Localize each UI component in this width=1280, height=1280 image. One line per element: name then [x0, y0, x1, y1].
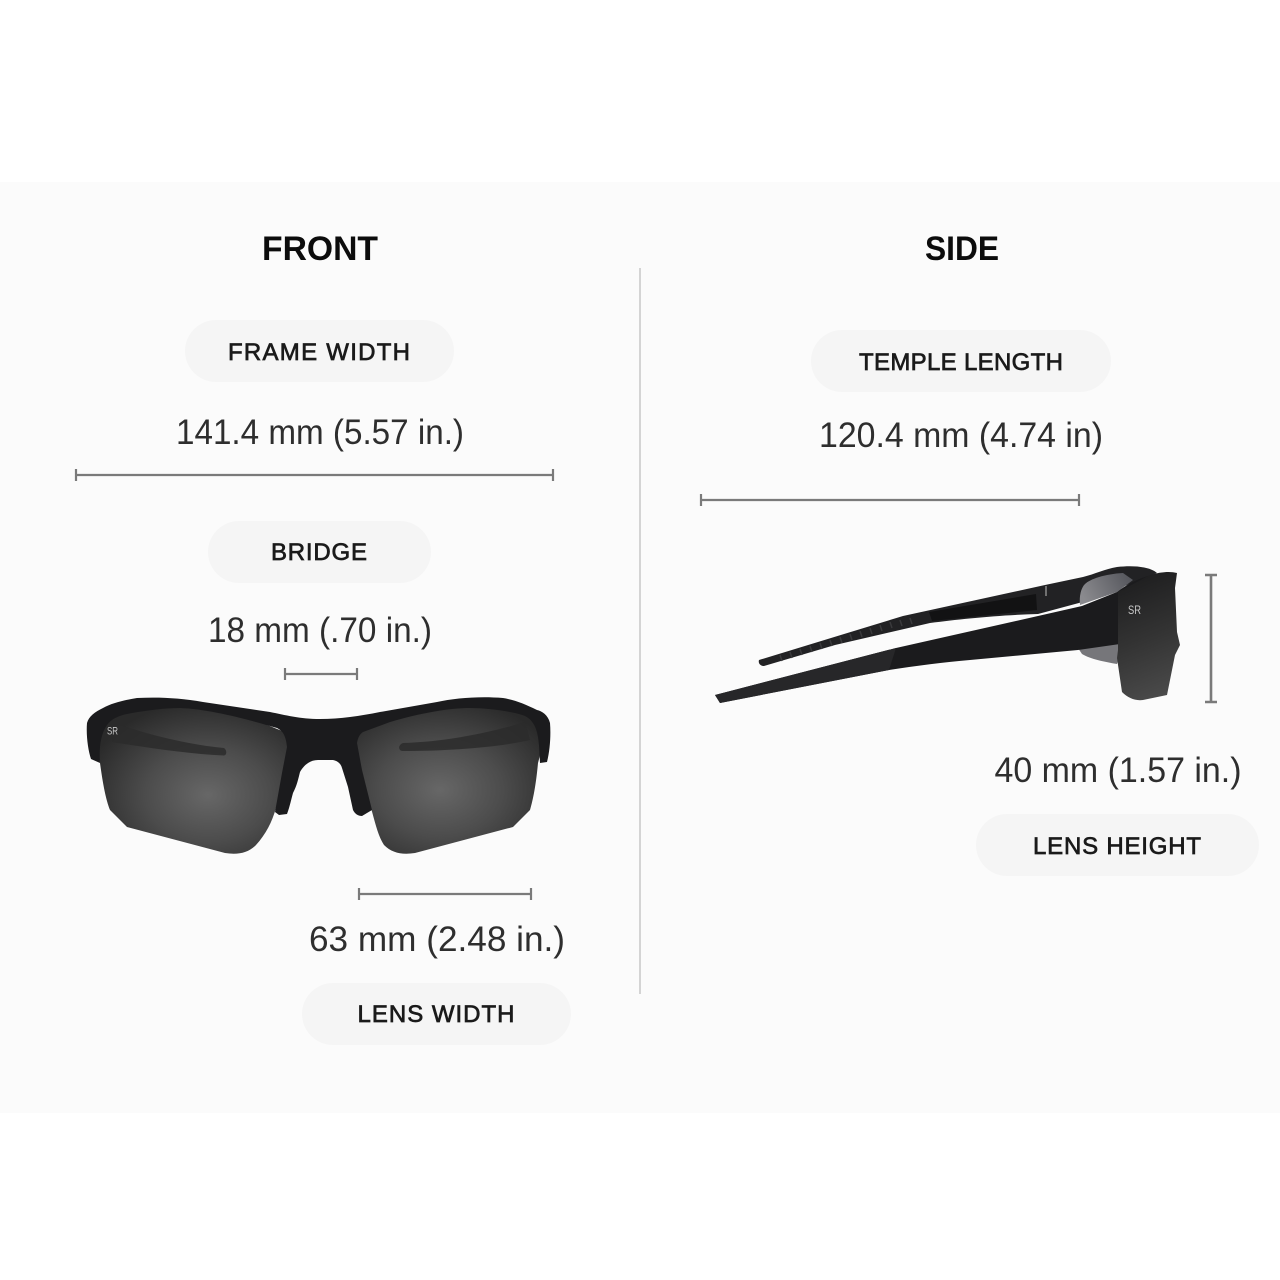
- bridge label: BRIDGE: [271, 539, 367, 566]
- bridge value: 18 mm (.70 in.): [208, 611, 432, 650]
- side lens: [1117, 572, 1180, 700]
- bridge label: [208, 521, 431, 583]
- temple length label: TEMPLE LENGTH: [859, 349, 1063, 376]
- lens height value: 40 mm (1.57 in.): [994, 751, 1242, 790]
- lens height label: LENS HEIGHT: [1033, 833, 1201, 860]
- heading: side: SIDE: [925, 230, 999, 268]
- temple ribbing: [780, 618, 912, 661]
- left lens reflection: [112, 725, 226, 756]
- side logo SR: SR: [1128, 603, 1141, 617]
- hinge mark: [1045, 586, 1047, 596]
- front view sunglasses: [87, 697, 550, 854]
- near temple: [715, 574, 1163, 703]
- far temple: [759, 566, 1157, 666]
- temple length label: [811, 330, 1111, 392]
- frame width label: FRAME WIDTH: [228, 339, 410, 366]
- temple length value: 120.4 mm (4.74 in): [819, 416, 1103, 455]
- temple tip shading: [715, 648, 896, 703]
- frame width label: [185, 320, 454, 382]
- frame width value: 141.4 mm (5.57 in.): [176, 413, 464, 452]
- side view sunglasses: [715, 566, 1180, 703]
- inner lens lower: [1078, 640, 1125, 664]
- left lens: [96, 704, 292, 854]
- inner lens upper: [1080, 573, 1133, 605]
- right lens: [352, 704, 544, 854]
- lens width label: [302, 983, 571, 1045]
- lens height label: [976, 814, 1259, 876]
- heading: front: FRONT: [262, 230, 378, 268]
- logo SR: SR: [107, 726, 118, 738]
- lens width measure line: [359, 888, 531, 900]
- right lens reflection: [399, 722, 530, 751]
- background panel: [0, 182, 1280, 1113]
- lens width label: LENS WIDTH: [358, 1001, 514, 1028]
- lens height measure line: [1205, 575, 1217, 702]
- frame: [87, 697, 550, 816]
- lens width value: 63 mm (2.48 in.): [309, 920, 565, 959]
- temple inset panel: [929, 594, 1037, 621]
- bridge measure line: [285, 668, 357, 680]
- frame width measure line: [76, 469, 553, 481]
- center divider: [639, 268, 641, 994]
- temple length measure line: [701, 494, 1079, 506]
